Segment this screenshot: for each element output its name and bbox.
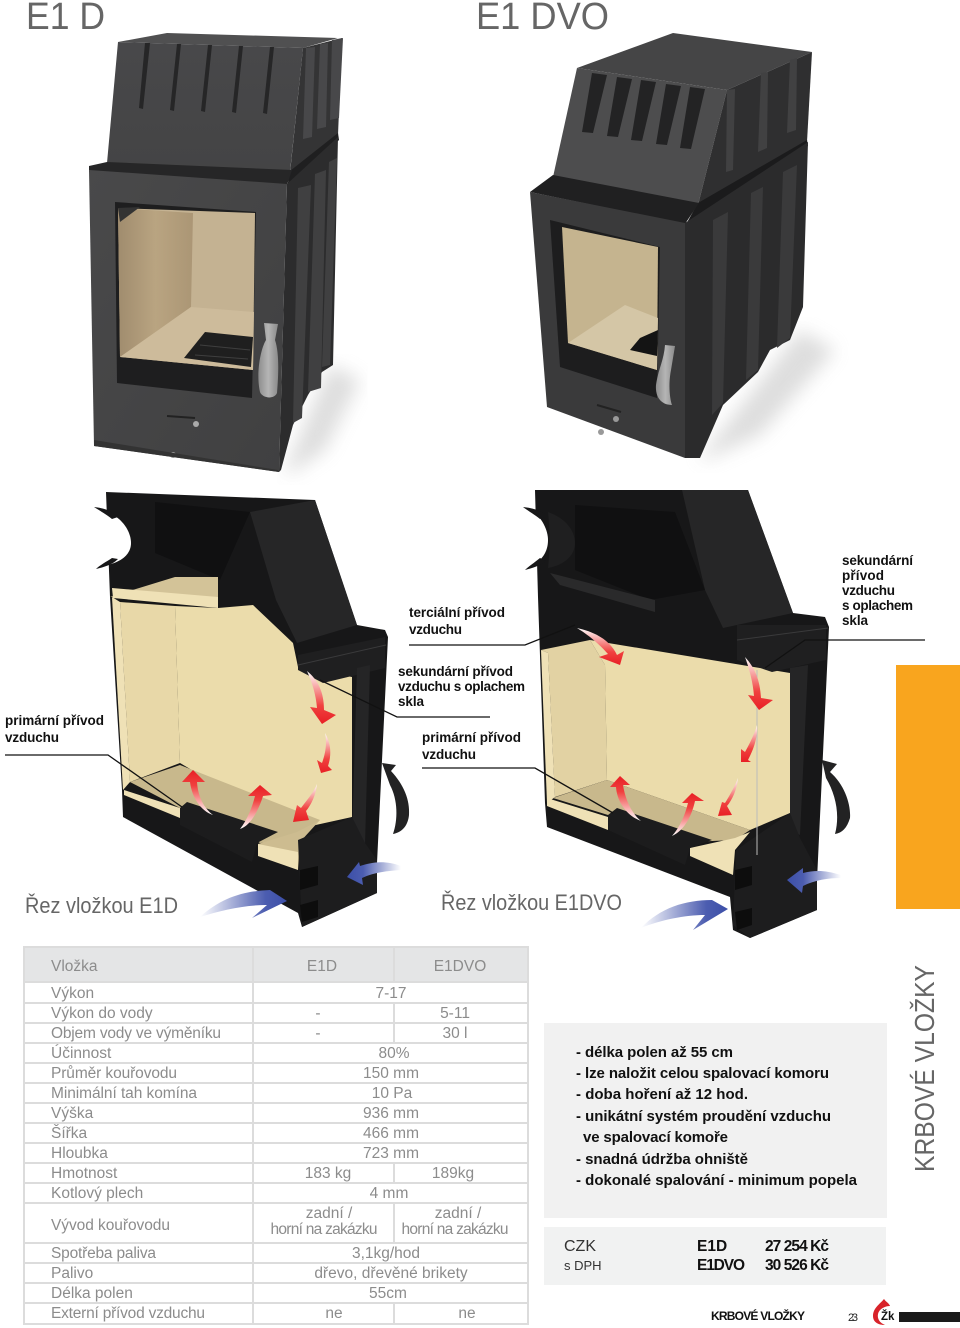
door handle [258,323,278,397]
footer [711,1299,960,1325]
row values: 936 mm [363,1105,419,1122]
air flow arrows [182,671,401,918]
row values: horní na zakázku [402,1221,508,1238]
row values: 30 l [442,1025,468,1042]
row labels: Průměr kouřovodu [51,1065,177,1082]
callout: sekundární přívod vzduchu s oplachem skla (left): skla [398,694,424,709]
row values: - [315,1005,321,1022]
row values: dřevo, dřevěné brikety [314,1265,468,1282]
row values: 183 kg [305,1165,351,1182]
row labels: Výkon do vody [51,1005,153,1022]
row values: ne [458,1305,476,1322]
price panel: CZK [564,1238,596,1255]
price panel: E1D [697,1238,727,1255]
row values: 150 mm [363,1065,419,1082]
callout: primární přívod vzduchu (right) [422,730,613,813]
callout: sekundární přívod vzduchu s oplachem skla (right): skla [842,613,868,628]
table header: Vložka [51,958,98,975]
footer: 23 [848,1312,858,1324]
row labels: Objem vody ve výměníku [51,1025,221,1042]
row labels: Spotřeba paliva [51,1245,156,1262]
row values: 4 mm [370,1185,408,1202]
product image: E1 D stove [89,33,360,474]
air flow arrows [577,628,841,930]
table header: E1DVO [434,958,486,975]
heading: Řez vložkou E1D: Řez vložkou E1D [25,893,178,918]
features panel: - dokonalé spalování - minimum popela [576,1172,858,1189]
row labels: Minimální tah komína [51,1085,197,1102]
features panel: - doba hoření až 12 hod. [576,1086,748,1103]
features panel: - délka polen až 55 cm [576,1044,733,1061]
row values: 80% [378,1045,410,1062]
row values: horní na zakázku [270,1221,378,1238]
cutaway diagram: E1DVO [523,490,850,938]
row values: 3,1kg/hod [352,1245,420,1262]
product image: E1 DVO stove [530,33,835,460]
row values: 723 mm [363,1145,419,1162]
callout: sekundární přívod vzduchu s oplachem skla (left): vzduchu s oplachem [398,679,525,694]
features panel: - lze naložit celou spalovací komoru [576,1065,829,1082]
cutaway diagram: E1D [94,492,409,927]
row labels: Výkon [51,985,94,1002]
spec table [24,947,528,1324]
row values: - [315,1025,321,1042]
row labels: Palivo [51,1265,93,1282]
row labels: Délka polen [51,1285,133,1302]
row labels: Hloubka [51,1145,108,1162]
callout: sekundární přívod vzduchu s oplachem skla (right): vzduchu [842,583,895,598]
callout: terciální přívod vzduchu: vzduchu [409,622,462,637]
callout: sekundární přívod vzduchu s oplachem skla (right): přívod [842,568,884,583]
features panel: - snadná údržba ohniště [576,1151,748,1168]
row values: 5-11 [440,1005,470,1022]
row labels: Vývod kouřovodu [51,1217,170,1234]
leader lines and callouts [5,553,925,813]
footer: KRBOVÉ VLOŽKY [711,1308,805,1323]
door handle [382,763,409,834]
row values: 55cm [369,1285,407,1302]
callout: primární přívod vzduchu (right): vzduchu [422,747,476,762]
row labels: Výška [51,1105,94,1122]
price panel: E1DVO [697,1257,745,1274]
row labels: Účinnost [51,1045,112,1062]
flue pipe opening [523,507,575,570]
price panel: s DPH [564,1258,602,1273]
row values: zadní / [435,1205,482,1222]
price panel [544,1227,886,1285]
row values: zadní / [306,1205,353,1222]
price panel: 30 526 Kč [765,1257,829,1274]
callout: sekundární přívod vzduchu s oplachem skla (left) [320,664,525,717]
row labels [51,985,221,1322]
row labels: Externí přívod vzduchu [51,1305,205,1322]
heading: Řez vložkou E1DVO: Řez vložkou E1DVO [441,890,622,915]
callout: primární přívod vzduchu (left) [5,713,182,807]
row values: ne [325,1305,343,1322]
callout: terciální přívod vzduchu [409,605,575,645]
orange side tab [896,665,960,909]
logo: Žk [881,1310,895,1323]
callout: sekundární přívod vzduchu s oplachem skla (right): sekundární [842,553,914,568]
row labels: Kotlový plech [51,1185,143,1202]
row values [270,985,508,1322]
logo [873,1299,895,1325]
callout: sekundární přívod vzduchu s oplachem skla (left): sekundární přívod [398,664,513,679]
callout: primární přívod vzduchu (left): vzduchu [5,730,59,745]
door handle [656,345,675,405]
callout: primární přívod vzduchu (right): primární přívod [422,730,521,745]
door handle [822,760,850,834]
callout: sekundární přívod vzduchu s oplachem skla (right): s oplachem [842,598,913,613]
callout: primární přívod vzduchu (left): primární přívod [5,713,104,728]
row values: 7-17 [375,985,407,1002]
features panel [544,1023,887,1218]
row values: 189kg [432,1165,474,1182]
callout: terciální přívod vzduchu: terciální přívod [409,605,505,620]
features panel: - unikátní systém proudění vzduchu [576,1108,831,1125]
row values: 10 Pa [372,1085,413,1102]
features panel: ve spalovací komoře [583,1129,728,1146]
row labels: Šířka [51,1125,88,1142]
vertical section title: KRBOVÉ VLOŽKY [909,965,940,1172]
table header: E1D [307,958,337,975]
table header [51,958,486,975]
price panel: 27 254 Kč [765,1238,829,1255]
flue pipe opening [94,507,131,569]
callout: sekundární přívod vzduchu s oplachem skla (right) [765,553,925,668]
row labels: Hmotnost [51,1165,118,1182]
row values: 466 mm [363,1125,419,1142]
